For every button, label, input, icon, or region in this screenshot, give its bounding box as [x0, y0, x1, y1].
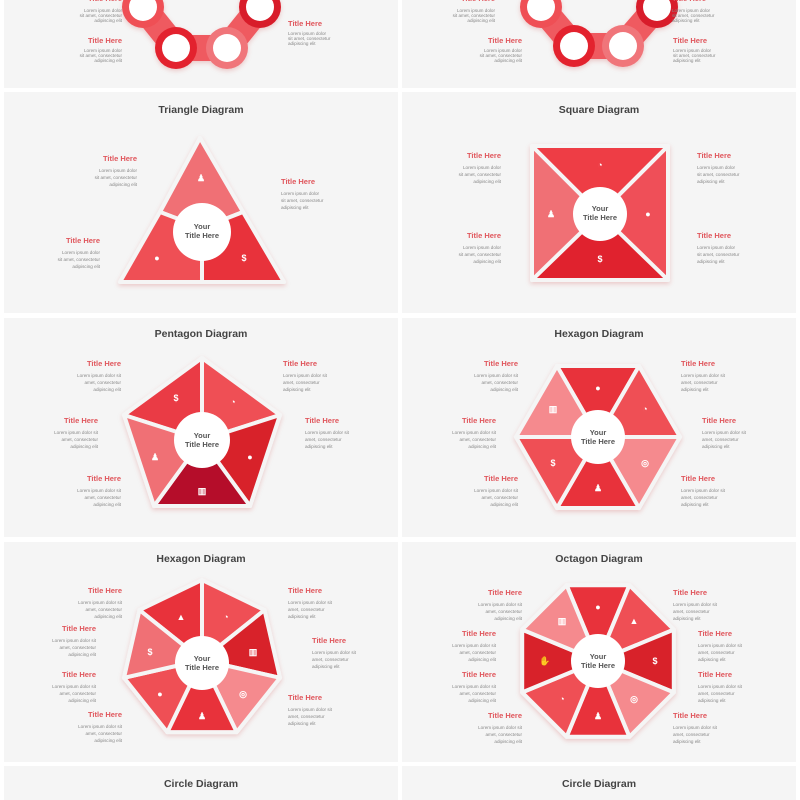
square chart: ● — [645, 209, 651, 219]
labels hexagon: Lorem ipsum dolor sit — [452, 430, 497, 435]
labels heptagon: adipiscing elit — [312, 664, 340, 669]
labels right chain: sit amet, consectetur — [672, 13, 715, 18]
labels heptagon: Lorem ipsum dolor sit — [312, 650, 357, 655]
labels square: adipiscing elit — [697, 179, 725, 184]
labels square: Lorem ipsum dolor — [697, 165, 736, 170]
labels octagon — [452, 588, 743, 744]
labels heptagon: Lorem ipsum dolor sit — [78, 724, 123, 729]
pentagon chart: Your — [194, 431, 210, 440]
panel: pentagon diagram — [4, 318, 398, 537]
triangle chart: ♟ — [197, 173, 205, 183]
labels pentagon: adipiscing elit — [70, 444, 99, 449]
labels heptagon: amet, consectetur — [85, 731, 122, 736]
labels octagon: Lorem ipsum dolor sit — [478, 602, 523, 607]
labels pentagon: Title Here — [64, 416, 98, 425]
labels pentagon: Lorem ipsum dolor sit — [77, 488, 122, 493]
labels octagon: adipiscing elit — [468, 657, 497, 662]
labels square: adipiscing elit — [473, 259, 502, 264]
labels triangle: sit amet, consectetur — [95, 175, 137, 180]
labels triangle: adipiscing elit — [72, 264, 101, 269]
chain diagram right — [520, 0, 678, 67]
labels pentagon: adipiscing elit — [93, 502, 122, 507]
labels heptagon: Lorem ipsum dolor sit — [78, 600, 123, 605]
hexagon chart: ◔ — [642, 404, 648, 414]
heptagon chart: ▥ — [249, 647, 257, 657]
labels octagon: adipiscing elit — [698, 698, 726, 703]
heptagon chart: $ — [147, 647, 153, 657]
labels hexagon: Lorem ipsum dolor sit — [702, 430, 747, 435]
labels triangle: Title Here — [66, 236, 100, 245]
panel: octagon diagram — [402, 542, 796, 762]
labels octagon: Title Here — [673, 711, 707, 720]
labels right chain: Lorem ipsum dolor — [673, 48, 712, 53]
labels octagon: amet, consectetur — [698, 691, 735, 696]
labels heptagon: amet, consectetur — [288, 714, 325, 719]
hexagon chart: Title Here — [581, 437, 615, 446]
labels heptagon: adipiscing elit — [288, 614, 316, 619]
panel: triangle diagram — [4, 92, 398, 313]
labels heptagon: Title Here — [62, 624, 96, 633]
labels hexagon: adipiscing elit — [702, 444, 730, 449]
labels left chain: sit amet, consectetur — [80, 53, 122, 58]
labels triangle: adipiscing elit — [109, 182, 138, 187]
labels heptagon: Lorem ipsum dolor sit — [52, 638, 97, 643]
labels hexagon: Lorem ipsum dolor sit — [681, 373, 726, 378]
labels hexagon: Title Here — [681, 359, 715, 368]
labels octagon: Lorem ipsum dolor sit — [698, 643, 743, 648]
labels left chain: adipiscing elit — [288, 41, 316, 46]
labels heptagon: Title Here — [288, 693, 322, 702]
labels pentagon: Lorem ipsum dolor sit — [283, 373, 328, 378]
octagon chart: Your — [590, 652, 606, 661]
labels octagon: Lorem ipsum dolor sit — [698, 684, 743, 689]
labels triangle — [58, 154, 324, 269]
labels triangle: adipiscing elit — [281, 205, 309, 210]
labels heptagon: Lorem ipsum dolor sit — [288, 600, 333, 605]
labels pentagon: amet, consectetur — [84, 495, 121, 500]
pentagon chart: $ — [173, 393, 179, 403]
labels hexagon: Title Here — [484, 474, 518, 483]
labels hexagon: adipiscing elit — [490, 387, 519, 392]
labels right chain: Lorem ipsum dolor — [484, 48, 522, 53]
labels square: adipiscing elit — [697, 259, 725, 264]
labels pentagon: Lorem ipsum dolor sit — [77, 373, 122, 378]
chain diagram left — [122, 0, 281, 69]
octagon chart: ◎ — [630, 694, 638, 704]
labels octagon: amet, consectetur — [485, 609, 522, 614]
labels triangle: Lorem ipsum dolor — [62, 250, 100, 255]
labels octagon: amet, consectetur — [485, 732, 522, 737]
labels heptagon: adipiscing elit — [68, 652, 97, 657]
panel: circle diagram right — [402, 766, 796, 800]
labels octagon: amet, consectetur — [673, 732, 710, 737]
labels pentagon: Title Here — [283, 359, 317, 368]
labels right chain: sit amet, consectetur — [673, 53, 716, 58]
heading: Circle Diagram — [562, 778, 636, 790]
triangle chart: ● — [154, 253, 160, 263]
labels square: Lorem ipsum dolor — [463, 245, 501, 250]
heading: Circle Diagram — [164, 778, 238, 790]
panel: top-left chain — [4, 0, 398, 88]
labels octagon: Lorem ipsum dolor sit — [452, 684, 497, 689]
heptagon chart: ◎ — [239, 689, 247, 699]
square chart: Your — [592, 204, 608, 213]
labels square: Title Here — [697, 151, 731, 160]
labels square: sit amet, consectetur — [697, 252, 740, 257]
labels square — [459, 151, 740, 264]
labels heptagon: Title Here — [88, 710, 122, 719]
labels square: Lorem ipsum dolor — [697, 245, 736, 250]
pentagon chart: ▥ — [198, 486, 206, 496]
labels left chain — [80, 0, 331, 63]
labels hexagon: amet, consectetur — [459, 437, 496, 442]
labels square: Title Here — [467, 231, 501, 240]
labels octagon: adipiscing elit — [698, 657, 726, 662]
pentagon chart: Title Here — [185, 440, 219, 449]
labels left chain: Lorem ipsum dolor — [84, 48, 122, 53]
heptagon chart: ♟ — [198, 711, 206, 721]
hexagon chart: ● — [595, 383, 601, 393]
heptagon chart: Your — [194, 654, 210, 663]
labels octagon: Lorem ipsum dolor sit — [478, 725, 523, 730]
labels pentagon: amet, consectetur — [305, 437, 342, 442]
labels hexagon: Title Here — [462, 416, 496, 425]
triangle chart: $ — [241, 253, 247, 263]
labels heptagon: amet, consectetur — [59, 691, 96, 696]
labels hexagon: Lorem ipsum dolor sit — [681, 488, 726, 493]
heptagon chart: ▲ — [177, 612, 185, 622]
labels hexagon: adipiscing elit — [681, 502, 709, 507]
octagon chart: ◔ — [559, 694, 565, 704]
labels pentagon: Lorem ipsum dolor sit — [54, 430, 99, 435]
labels right chain: adipiscing elit — [672, 18, 700, 23]
labels pentagon: adipiscing elit — [93, 387, 122, 392]
square chart: Title Here — [583, 213, 617, 222]
labels octagon: amet, consectetur — [698, 650, 735, 655]
labels right chain: Lorem ipsum dolor — [457, 8, 495, 13]
labels triangle: sit amet, consectetur — [58, 257, 100, 262]
labels heptagon: amet, consectetur — [59, 645, 96, 650]
labels pentagon: Title Here — [87, 359, 121, 368]
labels octagon: Lorem ipsum dolor sit — [452, 643, 497, 648]
labels hexagon: Title Here — [681, 474, 715, 483]
labels pentagon: amet, consectetur — [84, 380, 121, 385]
labels left chain: sit amet, consectetur — [80, 13, 122, 18]
labels square: Title Here — [697, 231, 731, 240]
pentagon chart: ◔ — [230, 397, 236, 407]
labels square: sit amet, consectetur — [459, 172, 501, 177]
labels octagon: Title Here — [462, 670, 496, 679]
labels right chain: adipiscing elit — [494, 58, 523, 63]
heading: Pentagon Diagram — [155, 328, 247, 340]
labels octagon: adipiscing elit — [673, 739, 701, 744]
triangle chart — [120, 138, 284, 282]
labels heptagon: Lorem ipsum dolor sit — [288, 707, 333, 712]
octagon chart: ✋ — [539, 655, 551, 666]
labels hexagon: Title Here — [702, 416, 736, 425]
panel: heptagon (hexagon) diagram — [4, 542, 398, 762]
labels right chain: Title Here — [488, 36, 522, 45]
triangle chart: Title Here — [185, 231, 219, 240]
labels pentagon: amet, consectetur — [61, 437, 98, 442]
labels octagon: amet, consectetur — [673, 609, 710, 614]
labels square: sit amet, consectetur — [459, 252, 501, 257]
labels left chain: Title Here — [88, 36, 122, 45]
labels left chain: sit amet, consectetur — [288, 36, 331, 41]
octagon chart: ▥ — [558, 616, 566, 626]
hexagon chart: ▥ — [549, 404, 557, 414]
labels heptagon: Title Here — [288, 586, 322, 595]
labels octagon: Title Here — [673, 588, 707, 597]
labels heptagon: adipiscing elit — [288, 721, 316, 726]
heading: Hexagon Diagram — [554, 328, 644, 340]
labels heptagon: amet, consectetur — [288, 607, 325, 612]
labels heptagon: adipiscing elit — [94, 614, 123, 619]
labels hexagon: amet, consectetur — [481, 380, 518, 385]
panel: circle diagram left — [4, 766, 398, 800]
labels triangle: sit amet, consectetur — [281, 198, 324, 203]
hexagon chart — [516, 366, 680, 508]
labels hexagon: amet, consectetur — [681, 495, 718, 500]
octagon chart: ● — [595, 602, 601, 612]
labels square: Title Here — [467, 151, 501, 160]
octagon chart: Title Here — [581, 661, 615, 670]
octagon chart: ▲ — [630, 616, 638, 626]
labels octagon: adipiscing elit — [673, 616, 701, 621]
labels left chain: Lorem ipsum dolor — [288, 31, 327, 36]
labels hexagon: adipiscing elit — [490, 502, 519, 507]
labels square: Lorem ipsum dolor — [463, 165, 501, 170]
labels pentagon: adipiscing elit — [283, 387, 311, 392]
labels heptagon: Title Here — [312, 636, 346, 645]
labels right chain: Title Here — [673, 36, 707, 45]
labels pentagon: Lorem ipsum dolor sit — [305, 430, 350, 435]
hexagon chart: ◎ — [641, 458, 649, 468]
labels triangle: Title Here — [103, 154, 137, 163]
labels octagon: Lorem ipsum dolor sit — [673, 602, 718, 607]
labels square: adipiscing elit — [473, 179, 502, 184]
labels right chain — [453, 0, 716, 63]
square chart: ◔ — [597, 160, 603, 170]
triangle chart: Your — [194, 222, 210, 231]
labels triangle: Lorem ipsum dolor — [99, 168, 137, 173]
labels left chain: adipiscing elit — [94, 58, 123, 63]
panel: hexagon diagram — [402, 318, 796, 537]
panel: square diagram — [402, 92, 796, 313]
labels hexagon — [452, 359, 747, 507]
labels octagon: Lorem ipsum dolor sit — [673, 725, 718, 730]
octagon chart: ♟ — [594, 711, 602, 721]
labels hexagon: amet, consectetur — [481, 495, 518, 500]
hexagon chart: Your — [590, 428, 606, 437]
heptagon chart: Title Here — [185, 663, 219, 672]
labels heptagon: adipiscing elit — [68, 698, 97, 703]
labels right chain: adipiscing elit — [673, 58, 701, 63]
heading: Octagon Diagram — [555, 553, 643, 565]
octagon chart: $ — [652, 656, 658, 666]
heading: Hexagon Diagram — [156, 553, 246, 565]
labels heptagon — [52, 586, 357, 743]
heading: Square Diagram — [559, 104, 639, 116]
labels pentagon: amet, consectetur — [283, 380, 320, 385]
heptagon chart: ◔ — [223, 612, 229, 622]
pentagon chart: ♟ — [151, 452, 159, 462]
labels triangle: Lorem ipsum dolor — [281, 191, 320, 196]
labels heptagon: Title Here — [88, 586, 122, 595]
labels hexagon: Lorem ipsum dolor sit — [474, 488, 519, 493]
heading: Triangle Diagram — [158, 104, 244, 116]
labels heptagon: adipiscing elit — [94, 738, 123, 743]
labels hexagon: adipiscing elit — [681, 387, 709, 392]
square chart: $ — [597, 254, 603, 264]
panel: top-right chain — [402, 0, 796, 88]
hexagon chart: ♟ — [594, 483, 602, 493]
heptagon chart: ● — [157, 689, 163, 699]
labels hexagon: amet, consectetur — [702, 437, 739, 442]
labels hexagon: Lorem ipsum dolor sit — [474, 373, 519, 378]
labels octagon: amet, consectetur — [459, 650, 496, 655]
pentagon chart: ● — [247, 452, 253, 462]
pentagon chart — [124, 358, 280, 506]
heptagon chart — [124, 580, 280, 732]
labels pentagon: Title Here — [305, 416, 339, 425]
labels hexagon: Title Here — [484, 359, 518, 368]
labels octagon: Title Here — [462, 629, 496, 638]
labels hexagon: adipiscing elit — [468, 444, 497, 449]
labels heptagon: Title Here — [62, 670, 96, 679]
labels pentagon — [54, 359, 350, 507]
labels octagon: Title Here — [698, 629, 732, 638]
labels pentagon: adipiscing elit — [305, 444, 333, 449]
labels square: sit amet, consectetur — [697, 172, 740, 177]
labels hexagon: amet, consectetur — [681, 380, 718, 385]
labels octagon: adipiscing elit — [468, 698, 497, 703]
labels heptagon: amet, consectetur — [85, 607, 122, 612]
labels heptagon: amet, consectetur — [312, 657, 349, 662]
octagon chart — [522, 585, 674, 737]
labels right chain: sit amet, consectetur — [453, 13, 495, 18]
hexagon chart: $ — [550, 458, 556, 468]
labels left chain: Lorem ipsum dolor — [84, 8, 122, 13]
labels octagon: Title Here — [488, 711, 522, 720]
labels right chain: sit amet, consectetur — [480, 53, 522, 58]
labels octagon: adipiscing elit — [494, 616, 523, 621]
labels left chain: adipiscing elit — [94, 18, 123, 23]
labels octagon: adipiscing elit — [494, 739, 523, 744]
labels right chain: Lorem ipsum dolor — [672, 8, 711, 13]
labels triangle: Title Here — [281, 177, 315, 186]
labels heptagon: Lorem ipsum dolor sit — [52, 684, 97, 689]
labels right chain: adipiscing elit — [467, 18, 496, 23]
labels octagon: Title Here — [488, 588, 522, 597]
labels octagon: amet, consectetur — [459, 691, 496, 696]
square chart: ♟ — [547, 209, 555, 219]
labels pentagon: Title Here — [87, 474, 121, 483]
labels octagon: Title Here — [698, 670, 732, 679]
square chart — [532, 146, 668, 280]
labels left chain: Title Here — [288, 19, 322, 28]
